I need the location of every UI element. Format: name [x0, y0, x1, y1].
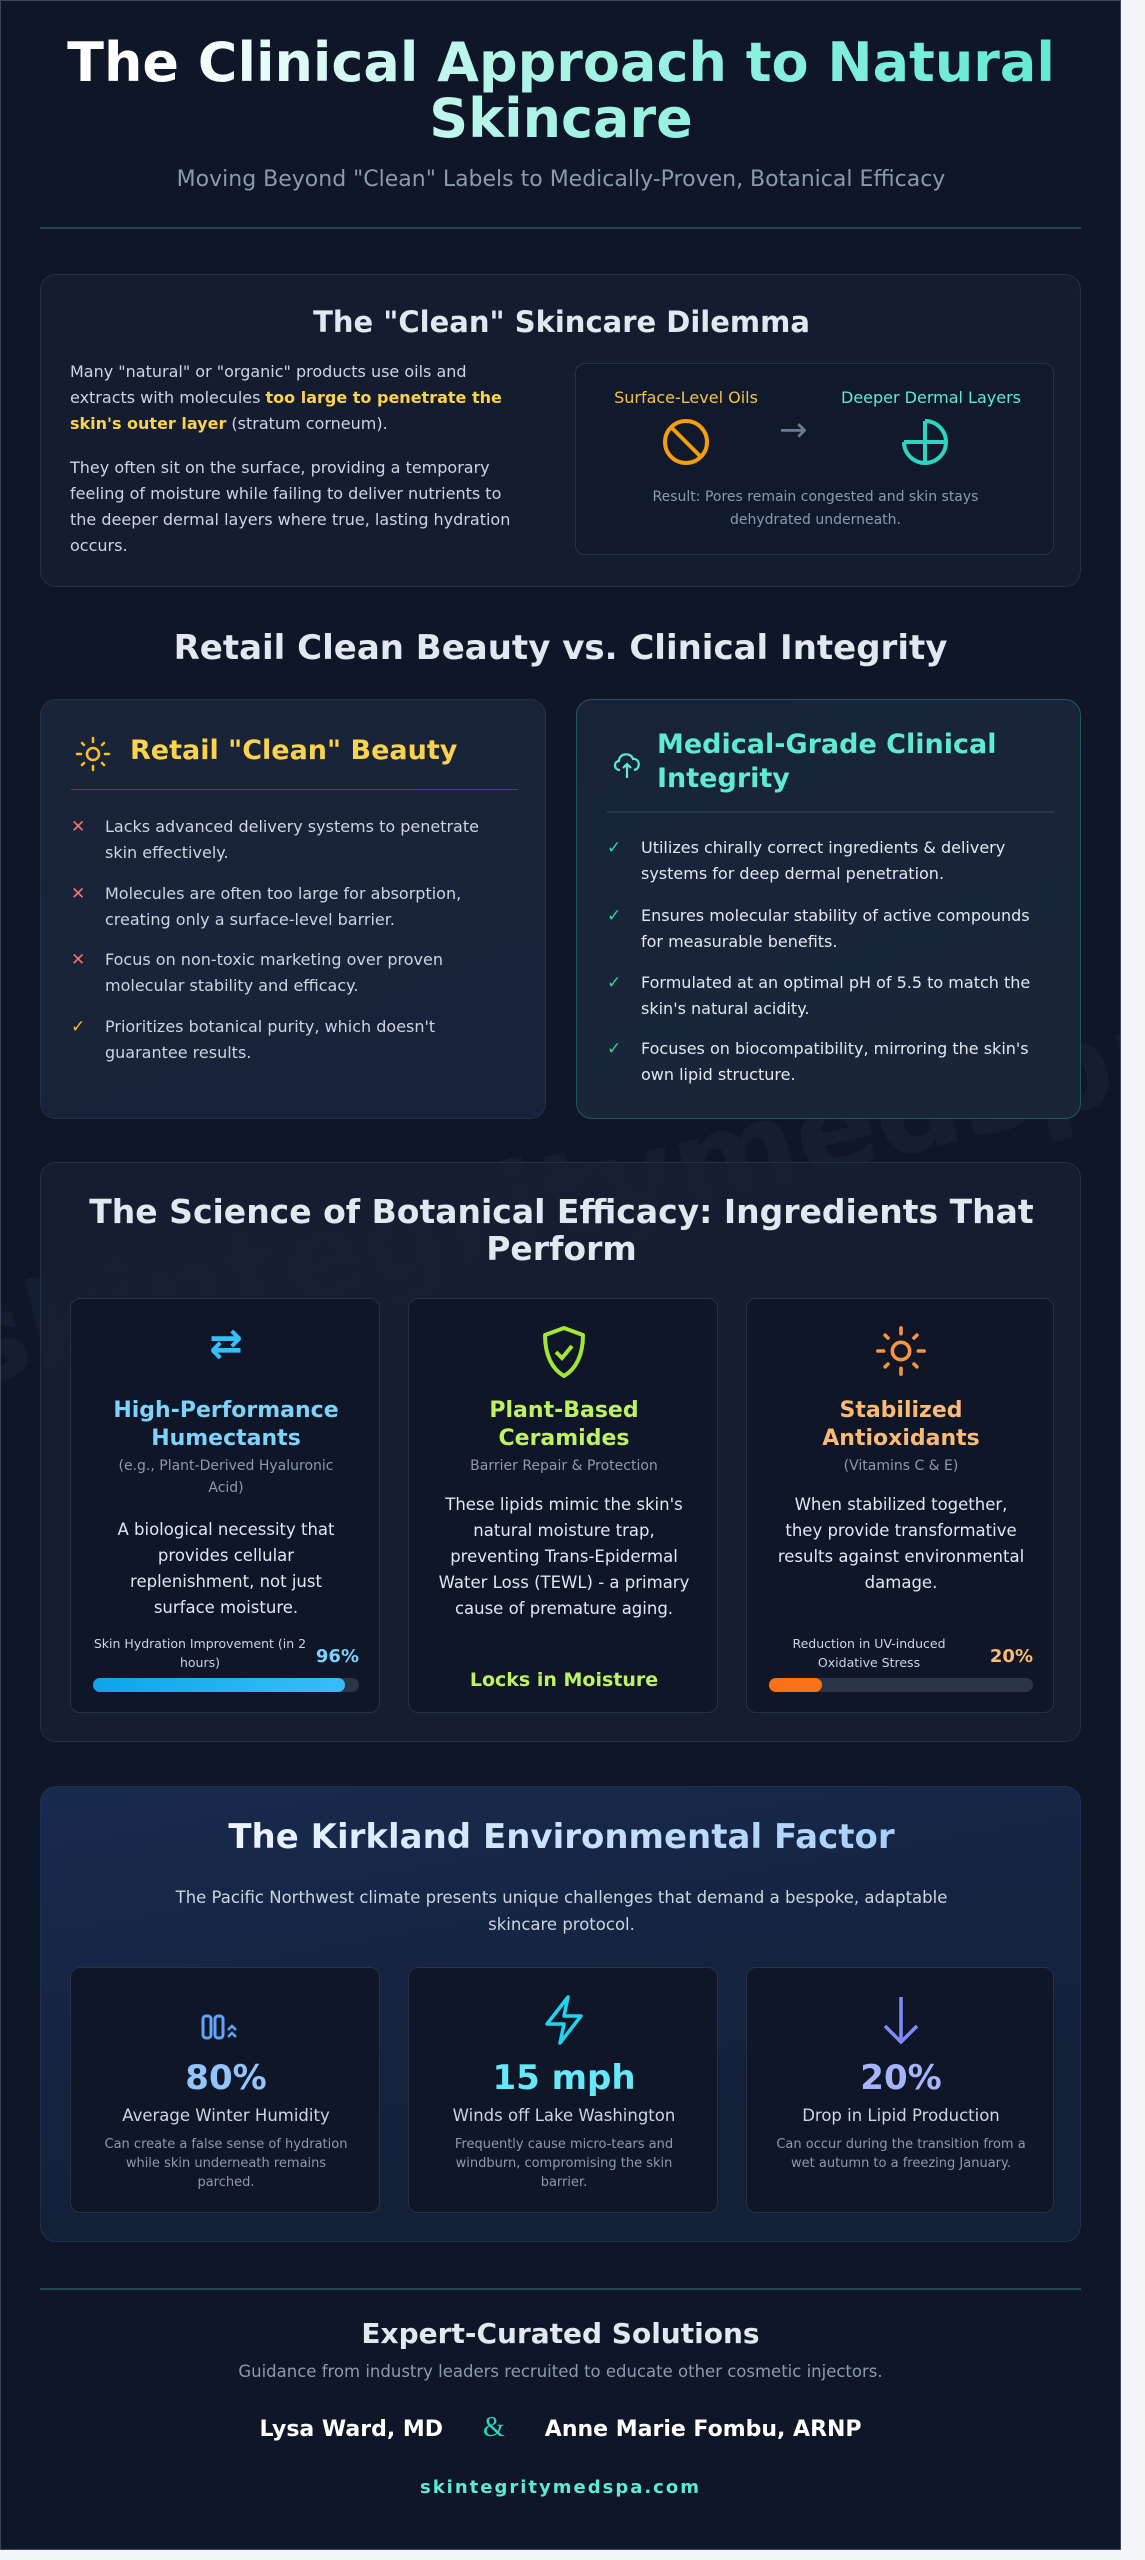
- icon: blocked: [663, 419, 709, 465]
- card: humectants: (e.g., Plant-Derived Hyaluronic Acid): [118, 1458, 334, 1496]
- panel: medical-grade: ✓: [607, 973, 621, 993]
- heading: retail: Retail "Clean" Beauty: [130, 735, 457, 766]
- card: antioxidants: When stabilized together, they provide transformative results against environmental damage.: [778, 1495, 1024, 1592]
- stat card: wind: Winds off Lake Washington: [453, 2106, 675, 2125]
- panel: medical-grade: ✓: [607, 906, 621, 926]
- card: antioxidants: [746, 1298, 1054, 1713]
- list: clinical benefits: Ensures molecular stability of active compounds for measurable benefits.: [641, 906, 1030, 951]
- diagram: surface vs dermal: [575, 363, 1054, 555]
- heading: medical-grade: Medical-Grade Clinical Integrity: [657, 729, 996, 794]
- card: antioxidants: (Vitamins C & E): [844, 1458, 958, 1474]
- panel: medical-grade: ✓: [607, 838, 621, 858]
- text: kirkland intro: The Pacific Northwest climate presents unique challenges that demand a bespoke, adaptable skincare protocol.: [176, 1888, 947, 1934]
- list: retail drawbacks: [71, 817, 479, 1062]
- card: ceramides: These lipids mimic the skin's natural moisture trap, preventing Trans-Epidermal Water Loss (TEWL) - a primary cause of premature aging.: [439, 1495, 689, 1618]
- subtitle: Moving Beyond "Clean" Labels to Medically-Proven, Botanical Efficacy: [177, 167, 945, 192]
- panel: retail clean beauty: [40, 699, 546, 1119]
- panel: medical-grade: ✓: [607, 1039, 621, 1059]
- icon: dermal layers: [902, 419, 948, 465]
- card: antioxidants: Stabilized Antioxidants: [822, 1398, 980, 1451]
- website: skintegritymedspa.com: [420, 2477, 701, 2498]
- icon: sun: [76, 736, 110, 772]
- stat card: humidity: Can create a false sense of hydration while skin underneath remains parched.: [105, 2137, 347, 2190]
- card: humectants: [70, 1298, 380, 1713]
- bar chart: oxidative stress 20%: [769, 1636, 1033, 1692]
- list: retail drawbacks: Focus on non-toxic marketing over proven molecular stability and efficacy.: [105, 950, 443, 995]
- panel: retail clean beauty: ✓: [71, 1017, 85, 1037]
- card: ceramides: Barrier Repair & Protection: [470, 1458, 658, 1474]
- card: humectants: High-Performance Humectants: [113, 1398, 339, 1451]
- list: retail drawbacks: Molecules are often too large for absorption, creating only a surface-level barrier.: [105, 884, 461, 929]
- heading: expert-curated solutions: Expert-Curated Solutions: [361, 2317, 760, 2350]
- list: clinical benefits: [607, 838, 1030, 1084]
- stat card: lipid: [746, 1967, 1054, 2213]
- icon: arrows: ⇄: [209, 1321, 243, 1367]
- title: The Clinical Approach to Natural Skincare: [67, 31, 1055, 150]
- card: ceramides: Plant-Based Ceramides: [489, 1398, 639, 1451]
- list: clinical benefits: Focuses on biocompatibility, mirroring the skin's own lipid structure.: [641, 1039, 1029, 1084]
- stat card: lipid: Drop in Lipid Production: [802, 2106, 1000, 2125]
- panel: medical-grade: [576, 699, 1081, 1119]
- stat card: wind: Frequently cause micro-tears and windburn, compromising the skin barrier.: [455, 2137, 673, 2190]
- icon: lightning: [545, 1995, 583, 2045]
- panel: kirkland environmental factor: [40, 1786, 1081, 2242]
- heading: kirkland: The Kirkland Environmental Factor: [228, 1817, 895, 1857]
- stat card: humidity: [70, 1967, 380, 2213]
- arrow: →: [779, 410, 808, 450]
- bar chart: hydration 96%: 96%: [316, 1646, 359, 1667]
- panel: retail clean beauty: ✕: [71, 884, 85, 904]
- stat card: humidity: 80%: [185, 2058, 267, 2098]
- text: result: Result: Pores remain congested and skin stays dehydrated underneath.: [653, 489, 978, 528]
- panel: science of botanical efficacy: [40, 1162, 1081, 1742]
- stat card: humidity: Average Winter Humidity: [122, 2106, 330, 2125]
- bar chart: oxidative stress 20%: 20%: [990, 1646, 1033, 1667]
- icon: humidity: [202, 2014, 237, 2040]
- stat card: lipid: 20%: [860, 2058, 942, 2098]
- callout: locks in moisture: Locks in Moisture: [470, 1669, 658, 1691]
- stat card: lipid: Can occur during the transition from a wet autumn to a freezing January.: [776, 2137, 1026, 2171]
- heading: comparison: Retail Clean Beauty vs. Clinical Integrity: [174, 628, 947, 668]
- text: dilemma body: [70, 362, 510, 555]
- bar chart: oxidative stress 20%: Reduction in UV-induced Oxidative Stress: [792, 1636, 946, 1670]
- card: humectants: A biological necessity that provides cellular replenishment, not just surface moisture.: [117, 1520, 335, 1617]
- heading: dilemma: The "Clean" Skincare Dilemma: [313, 305, 810, 339]
- stat card: wind: 15 mph: [492, 2058, 636, 2098]
- bar chart: hydration 96%: [93, 1636, 359, 1692]
- stat card: wind: [408, 1967, 718, 2213]
- list: clinical benefits: Utilizes chirally correct ingredients & delivery systems for deep dermal penetration.: [641, 838, 1005, 883]
- panel: clean skincare dilemma: [40, 274, 1081, 587]
- list: retail drawbacks: Lacks advanced delivery systems to penetrate skin effectively.: [105, 817, 479, 862]
- text: dilemma body: Many "natural" or "organic" products use oils and extracts with molecules too large to penetrate the skin's outer layer (stratum corneum).: [70, 362, 502, 433]
- panel: retail clean beauty: ✕: [71, 817, 85, 837]
- heading: science: The Science of Botanical Efficacy: Ingredients That Perform: [89, 1192, 1034, 1268]
- card: ceramides: [408, 1298, 718, 1713]
- heading: kirkland: [41, 1817, 1082, 1857]
- bar chart: hydration 96%: Skin Hydration Improvement (in 2 hours): [94, 1636, 306, 1670]
- names: Lysa Ward, MD & Anne Marie Fombu, ARNP: [259, 2412, 862, 2443]
- icon: sun orange: [876, 1326, 926, 1376]
- label: deeper dermal layers: Deeper Dermal Layers: [841, 388, 1021, 407]
- icon: cloud upload: [614, 753, 640, 778]
- label: surface-level oils: Surface-Level Oils: [614, 388, 758, 407]
- text: dilemma body: They often sit on the surface, providing a temporary feeling of moisture while failing to deliver nutrients to the deeper dermal layers where true, lasting hydration occurs.: [70, 458, 510, 555]
- list: retail drawbacks: Prioritizes botanical purity, which doesn't guarantee results.: [105, 1017, 435, 1062]
- list: clinical benefits: Formulated at an optimal pH of 5.5 to match the skin's natural acidity.: [641, 973, 1030, 1018]
- icon: shield: [543, 1326, 585, 1378]
- icon: down arrow: [884, 1997, 918, 2044]
- text: expert subtitle: Guidance from industry leaders recruited to educate other cosmetic injectors.: [238, 2362, 883, 2381]
- panel: retail clean beauty: ✕: [71, 950, 85, 970]
